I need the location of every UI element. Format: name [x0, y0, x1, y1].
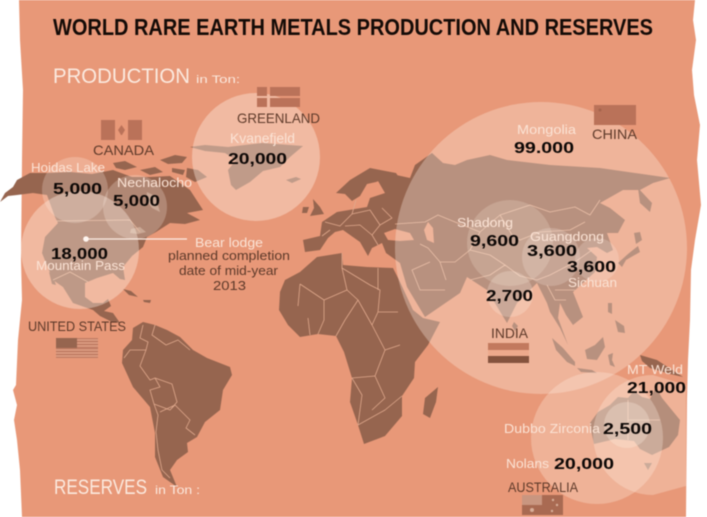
label: MT Weld	[627, 362, 686, 397]
label: Shadong	[457, 215, 519, 250]
label: India: INDIA	[491, 325, 529, 341]
label: Dubbo Zirconia: 2,500	[603, 421, 652, 438]
label: Hoidas Lake: Hoidas Lake	[31, 160, 105, 175]
land: North America	[0, 170, 203, 323]
bubble: Dubbo Zirconia	[604, 402, 650, 448]
label: Mountain Pass	[36, 246, 126, 273]
land: Madagascar	[423, 387, 438, 418]
land: Cuba and Caribbean	[123, 289, 151, 303]
label: Canada: CANADA	[93, 142, 155, 158]
callout: Bear lodge: date of mid-year	[179, 263, 279, 278]
label: Mongolia	[514, 122, 577, 157]
label: Hoidas Lake: 5,000	[53, 181, 102, 198]
label: Nolans: 20,000	[554, 456, 614, 473]
flag: Greenland	[257, 87, 300, 107]
label: MT Weld: 21,000	[627, 380, 686, 397]
land: Canadian Arctic islands	[113, 155, 207, 182]
bubble: Hoidas Lake	[42, 157, 108, 223]
bubble: Nechalocho	[103, 175, 167, 239]
land: Kamchatka peninsula	[638, 188, 652, 212]
land: Greenland	[190, 143, 303, 190]
callout: Bear lodge: 2013	[213, 278, 246, 293]
label: Sichuan: Sichuan	[568, 275, 617, 290]
bubble: Guangdong	[522, 228, 580, 286]
bubble: Sichuan	[575, 238, 619, 282]
bubble: MT Weld	[593, 375, 686, 495]
callout: Bear lodge	[83, 235, 290, 293]
label: Sichuan: 3,600	[567, 259, 616, 276]
label: Nechalocho: 5,000	[113, 193, 160, 210]
bubble: United States	[21, 191, 139, 309]
label: Nechalocho	[113, 175, 192, 210]
land: South America	[122, 322, 232, 487]
bubble: Shadong	[467, 200, 553, 286]
label: Mongolia: 99.000	[514, 140, 574, 157]
land: Indonesia and New Guinea	[552, 337, 683, 377]
label: MT Weld: MT Weld	[627, 362, 683, 377]
label: Shadong: Shadong	[457, 215, 513, 230]
label: Mongolia: Mongolia	[517, 122, 577, 137]
land: Britain and Ireland	[302, 199, 324, 216]
heading: reserves: in Ton :	[155, 483, 200, 497]
label: Hoidas Lake	[31, 160, 105, 198]
label: India value: 2,700	[486, 288, 533, 305]
heading: production: in Ton:	[196, 74, 240, 86]
land: Tasmania	[644, 463, 652, 470]
heading: reserves: RESERVES	[54, 476, 147, 499]
flag: Australia	[522, 495, 563, 515]
label: Mountain Pass: Mountain Pass	[36, 258, 126, 273]
label: Guangdong: 3,600	[527, 243, 577, 260]
land: Iceland	[286, 177, 301, 183]
label: Nechalocho: Nechalocho	[117, 175, 192, 190]
label: Sichuan	[567, 259, 617, 290]
label: Nolans	[506, 456, 614, 473]
label: Dubbo Zirconia	[504, 421, 652, 438]
label: Guangdong: Guangdong	[530, 229, 604, 244]
label: Australia: AUSTRALIA	[508, 479, 579, 495]
land: Scandinavia	[336, 168, 398, 201]
land: Sri Lanka	[512, 322, 518, 331]
callout: Bear lodge: Bear lodge	[195, 235, 263, 250]
heading: production: PRODUCTION	[53, 65, 190, 88]
bubble: Greenland	[192, 93, 320, 221]
bubble: Nolans	[531, 372, 663, 504]
label: United States: UNITED STATES	[28, 318, 126, 334]
land: Japan	[618, 232, 642, 267]
bubble: China	[395, 102, 687, 394]
label: Greenland: Kvanefjeld	[230, 130, 295, 146]
land: Africa	[279, 253, 440, 444]
water: Black Sea and Caspian Sea	[384, 222, 434, 243]
flag: China	[594, 105, 636, 125]
bubbles	[21, 93, 687, 504]
flag: United States	[56, 338, 98, 358]
label: Greenland	[228, 110, 320, 168]
country borders	[53, 200, 660, 478]
land: Baja California	[49, 272, 56, 285]
label: Shadong: 9,600	[470, 233, 519, 250]
map	[0, 143, 683, 487]
label: Greenland: 20,000	[228, 151, 287, 168]
flag: India	[488, 343, 529, 363]
land: Australia	[590, 387, 680, 455]
label: Dubbo Zirconia: Dubbo Zirconia	[504, 421, 601, 436]
water: Hudson Bay and Great Lakes	[130, 192, 160, 234]
land: Philippines	[608, 303, 625, 333]
label: China: CHINA	[592, 126, 638, 142]
label: Mountain Pass: 18,000	[51, 246, 108, 263]
label: Greenland: GREENLAND	[237, 110, 320, 126]
label: Guangdong	[527, 229, 604, 260]
bubble: India	[487, 271, 533, 317]
flag: Canada	[101, 120, 142, 140]
land: Eurasia	[303, 153, 670, 345]
callout: Bear lodge: planned completion	[168, 248, 290, 263]
label: Nolans: Nolans	[506, 456, 550, 471]
